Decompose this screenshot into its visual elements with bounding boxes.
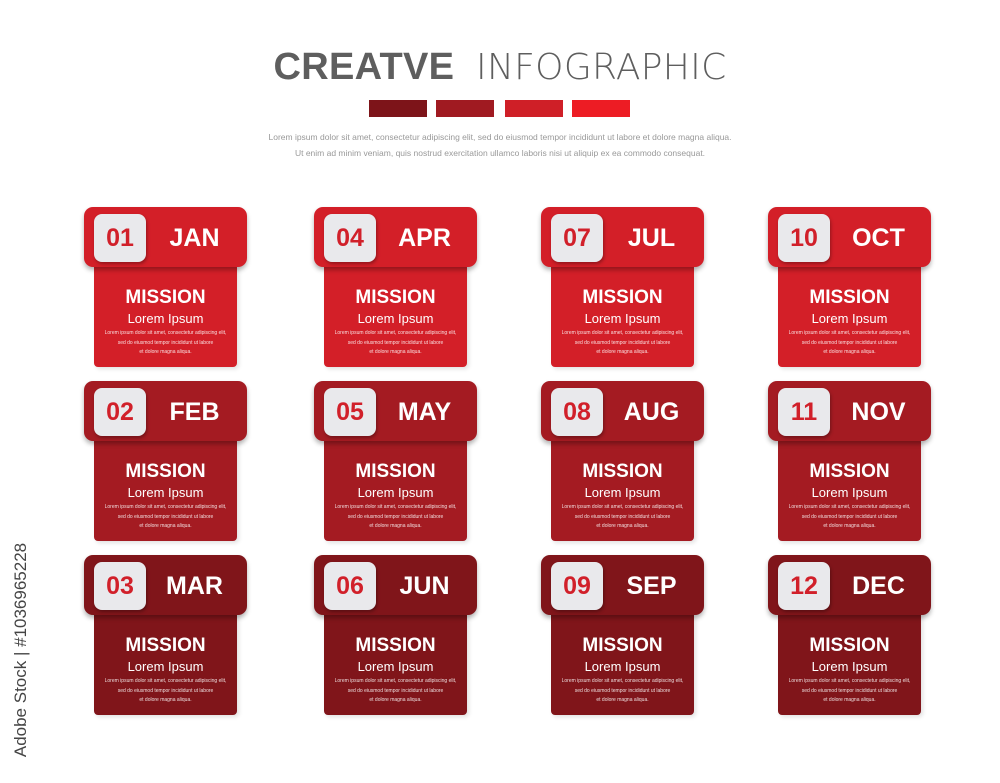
card 01 JAN: et dolore magna aliqua. (139, 349, 192, 355)
card 03 MAR: MAR (166, 572, 223, 600)
card 05 MAY: et dolore magna aliqua. (369, 523, 422, 529)
card 05 MAY (311, 381, 480, 544)
card 09 SEP: SEP (626, 572, 677, 600)
card 11 NOV: et dolore magna aliqua. (823, 523, 876, 529)
card 12 DEC: Lorem ipsum dolor sit amet, consectetur adipiscing elit, (789, 678, 910, 684)
card 03 MAR (81, 555, 250, 718)
watermark id: Adobe Stock | #1036965228 (11, 543, 30, 757)
card 05 MAY: MAY (398, 398, 451, 426)
card 10 OCT: 10 (790, 224, 818, 252)
subtitle text: Lorem ipsum dolor sit amet, consectetur adipiscing elit, sed do eiusmod tempor incididunt ut labore et dolore magna aliqua. (268, 132, 732, 142)
card 07 JUL (538, 207, 707, 370)
card 08 AUG: 08 (563, 398, 591, 426)
card 04 APR: Lorem Ipsum (358, 311, 433, 326)
card 05 MAY: Lorem ipsum dolor sit amet, consectetur adipiscing elit, (335, 504, 456, 510)
card 11 NOV: MISSION (809, 461, 890, 482)
card 07 JUL: Lorem ipsum dolor sit amet, consectetur adipiscing elit, (562, 330, 683, 336)
card 08 AUG: sed do eiusmod tempor incididunt ut labore (575, 514, 670, 520)
card 12 DEC: Lorem Ipsum (812, 659, 887, 674)
card 04 APR: sed do eiusmod tempor incididunt ut labore (348, 340, 443, 346)
card 03 MAR: 03 (106, 572, 134, 600)
card 10 OCT: OCT (852, 224, 905, 252)
card 01 JAN: sed do eiusmod tempor incididunt ut labore (118, 340, 213, 346)
card 07 JUL: MISSION (582, 287, 663, 308)
card 10 OCT: et dolore magna aliqua. (823, 349, 876, 355)
card 01 JAN: MISSION (125, 287, 206, 308)
card 07 JUL: Lorem Ipsum (585, 311, 660, 326)
card 01 JAN: 01 (106, 224, 134, 252)
card 06 JUN: MISSION (355, 635, 436, 656)
card 11 NOV: 11 (791, 398, 817, 426)
card 08 AUG: Lorem Ipsum (585, 485, 660, 500)
card 09 SEP: MISSION (582, 635, 663, 656)
card 03 MAR: Lorem ipsum dolor sit amet, consectetur adipiscing elit, (105, 678, 226, 684)
card 01 JAN: Lorem ipsum dolor sit amet, consectetur adipiscing elit, (105, 330, 226, 336)
card 06 JUN: JUN (399, 572, 450, 600)
card 10 OCT: sed do eiusmod tempor incididunt ut labore (802, 340, 897, 346)
card 01 JAN: Lorem Ipsum (128, 311, 203, 326)
card 08 AUG: AUG (624, 398, 679, 426)
card 12 DEC: DEC (852, 572, 905, 600)
card 02 FEB: sed do eiusmod tempor incididunt ut labore (118, 514, 213, 520)
card 07 JUL: JUL (628, 224, 675, 252)
title: CREATVE INFOGRAPHIC (273, 46, 727, 88)
card 10 OCT: MISSION (809, 287, 890, 308)
card 11 NOV: Lorem ipsum dolor sit amet, consectetur adipiscing elit, (789, 504, 910, 510)
card 12 DEC (765, 555, 934, 718)
card 02 FEB: FEB (170, 398, 220, 426)
card 04 APR (311, 207, 480, 370)
card 02 FEB: 02 (106, 398, 134, 426)
card 06 JUN: et dolore magna aliqua. (369, 697, 422, 703)
card 04 APR: 04 (336, 224, 364, 252)
card 06 JUN (311, 555, 480, 718)
card 03 MAR: sed do eiusmod tempor incididunt ut labore (118, 688, 213, 694)
card 02 FEB (81, 381, 250, 544)
card 01 JAN: JAN (169, 224, 220, 252)
card 05 MAY: MISSION (355, 461, 436, 482)
card 10 OCT: Lorem ipsum dolor sit amet, consectetur adipiscing elit, (789, 330, 910, 336)
card 02 FEB: MISSION (125, 461, 206, 482)
card 09 SEP: sed do eiusmod tempor incididunt ut labore (575, 688, 670, 694)
card 04 APR: Lorem ipsum dolor sit amet, consectetur adipiscing elit, (335, 330, 456, 336)
card 04 APR: MISSION (355, 287, 436, 308)
card 12 DEC: MISSION (809, 635, 890, 656)
card 06 JUN: Lorem ipsum dolor sit amet, consectetur adipiscing elit, (335, 678, 456, 684)
card 06 JUN: sed do eiusmod tempor incididunt ut labore (348, 688, 443, 694)
card 01 JAN (81, 207, 250, 370)
card 06 JUN: 06 (336, 572, 364, 600)
subtitle text: Ut enim ad minim veniam, quis nostrud exercitation ullamco laboris nisi ut aliquip ex ea commodo consequat. (295, 148, 705, 158)
card 07 JUL: 07 (563, 224, 591, 252)
color bars (369, 100, 630, 117)
card 11 NOV (765, 381, 934, 544)
card 08 AUG: et dolore magna aliqua. (596, 523, 649, 529)
card 09 SEP: 09 (563, 572, 591, 600)
card 09 SEP: Lorem Ipsum (585, 659, 660, 674)
card 03 MAR: MISSION (125, 635, 206, 656)
card 11 NOV: sed do eiusmod tempor incididunt ut labore (802, 514, 897, 520)
card 05 MAY: 05 (336, 398, 364, 426)
card 04 APR: et dolore magna aliqua. (369, 349, 422, 355)
card 11 NOV: NOV (851, 398, 906, 426)
card 02 FEB: et dolore magna aliqua. (139, 523, 192, 529)
card 10 OCT: Lorem Ipsum (812, 311, 887, 326)
card 09 SEP: Lorem ipsum dolor sit amet, consectetur adipiscing elit, (562, 678, 683, 684)
card 08 AUG (538, 381, 707, 544)
card 04 APR: APR (398, 224, 451, 252)
card 05 MAY: sed do eiusmod tempor incididunt ut labore (348, 514, 443, 520)
card 03 MAR: et dolore magna aliqua. (139, 697, 192, 703)
subtitle text (268, 132, 732, 158)
card 10 OCT (765, 207, 934, 370)
card 07 JUL: sed do eiusmod tempor incididunt ut labore (575, 340, 670, 346)
card 12 DEC: sed do eiusmod tempor incididunt ut labore (802, 688, 897, 694)
card 09 SEP (538, 555, 707, 718)
card 08 AUG: Lorem ipsum dolor sit amet, consectetur adipiscing elit, (562, 504, 683, 510)
card 09 SEP: et dolore magna aliqua. (596, 697, 649, 703)
card 07 JUL: et dolore magna aliqua. (596, 349, 649, 355)
card 11 NOV: Lorem Ipsum (812, 485, 887, 500)
card 02 FEB: Lorem Ipsum (128, 485, 203, 500)
card 03 MAR: Lorem Ipsum (128, 659, 203, 674)
card 05 MAY: Lorem Ipsum (358, 485, 433, 500)
card 12 DEC: et dolore magna aliqua. (823, 697, 876, 703)
card 08 AUG: MISSION (582, 461, 663, 482)
card 02 FEB: Lorem ipsum dolor sit amet, consectetur adipiscing elit, (105, 504, 226, 510)
card 06 JUN: Lorem Ipsum (358, 659, 433, 674)
card 12 DEC: 12 (790, 572, 818, 600)
